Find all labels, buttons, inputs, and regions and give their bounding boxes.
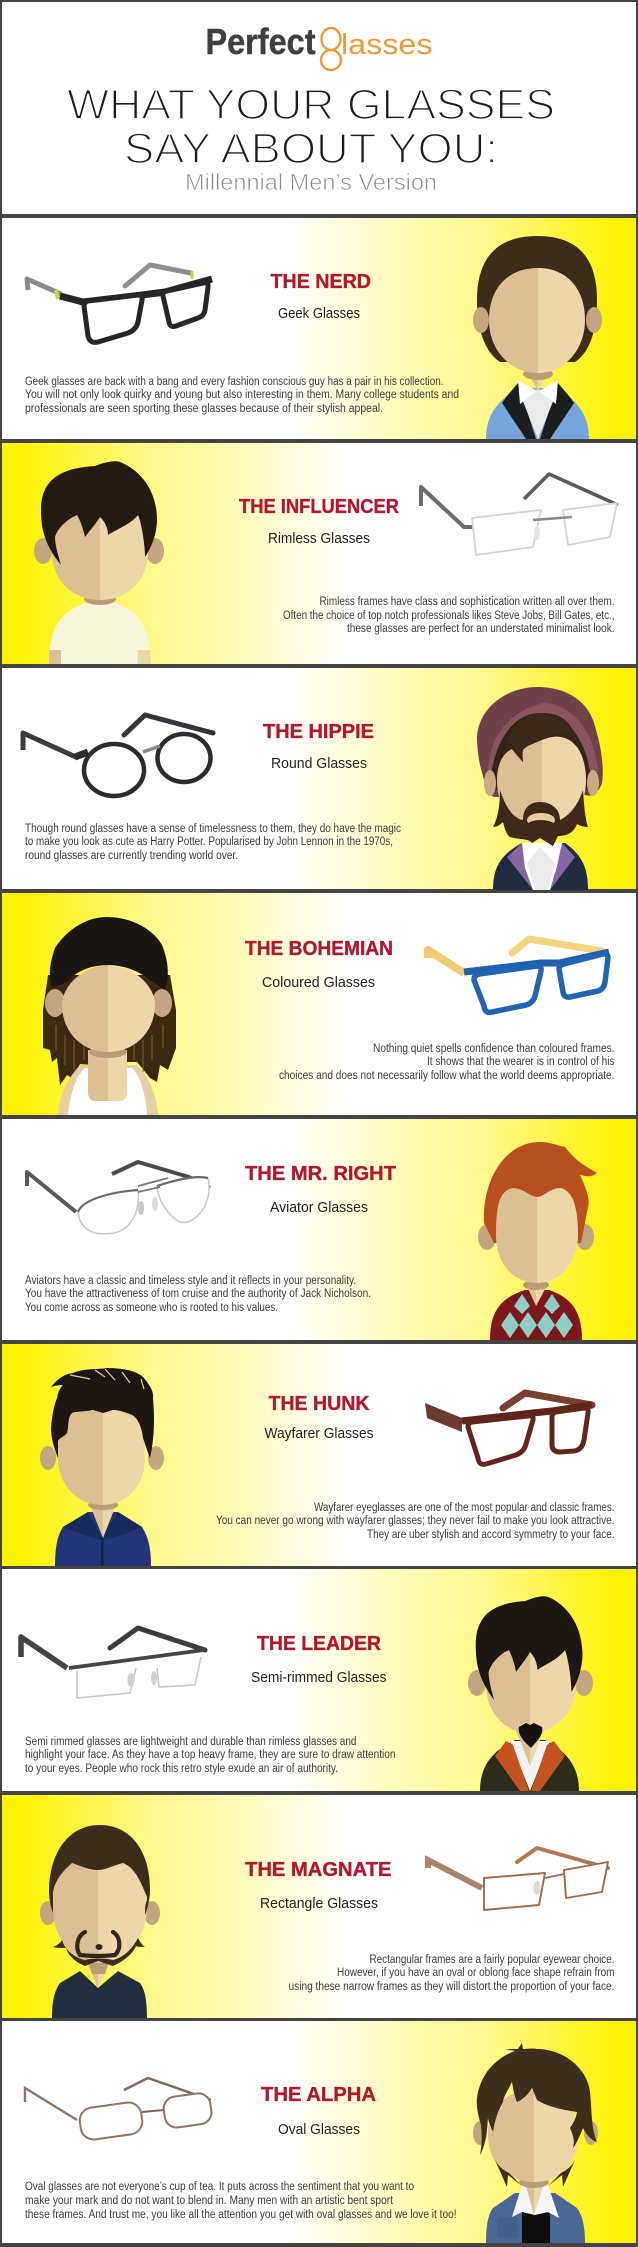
description: professionals are seen sporting these glasses because of their stylish appeal. — [25, 403, 383, 415]
character: hippie — [477, 687, 603, 890]
panel: the leader — [2, 1569, 636, 1791]
description: Aviators have a classic and timeless style and it reflects in your personality. — [25, 1275, 356, 1287]
panel: the hunk — [2, 1344, 636, 1566]
character: nerd — [473, 236, 602, 439]
description — [279, 1043, 615, 1082]
glasses type: Semi-rimmed Glasses — [251, 1670, 386, 1686]
panel: the mr. right — [2, 1119, 636, 1340]
heading: THE NERD — [270, 271, 371, 293]
character: influencer — [34, 461, 164, 664]
logo: Perfect Glasses: lasses — [341, 29, 432, 61]
glasses type: Round Glasses — [271, 756, 367, 772]
panel: header — [2, 2, 636, 214]
character: hunk — [40, 1368, 164, 1566]
panel: the bohemian — [2, 893, 636, 1115]
glasses type: Coloured Glasses — [262, 975, 375, 991]
heading: THE INFLUENCER — [239, 496, 400, 518]
glasses type: Rimless Glasses — [268, 531, 370, 547]
glasses: oval — [25, 2078, 213, 2141]
description — [25, 376, 459, 415]
description: these frames. And trust me, you like all the attention you get with oval glasses and we love it too! — [25, 2209, 456, 2221]
character: magnate — [40, 1825, 160, 2018]
glasses: wayfarer — [425, 1393, 592, 1464]
description: Semi rimmed glasses are lightweight and durable than rimless glasses and — [25, 1736, 356, 1748]
panel: the magnate — [2, 1795, 636, 2018]
panel: the hippie — [2, 668, 636, 890]
description: make your mark and do not want to blend in. Many men with an artistic bent sport — [25, 2195, 394, 2207]
heading: THE BOHEMIAN — [245, 938, 393, 960]
character: leader — [468, 1596, 593, 1791]
description — [25, 1736, 396, 1775]
heading: THE MAGNATE — [245, 1859, 392, 1881]
heading: THE ALPHA — [261, 2084, 376, 2106]
heading: THE HIPPIE — [263, 721, 374, 743]
title: SAY ABOUT YOU: — [124, 125, 498, 173]
description: round glasses are currently trending world over. — [25, 850, 238, 862]
panel: the alpha — [2, 2021, 636, 2243]
description: to make you look as cute as Harry Potter. Popularised by John Lennon in the 1970s, — [25, 836, 393, 848]
description: highlight your face. As they have a top heavy frame, they are sure to draw attention — [25, 1749, 396, 1761]
description: to your eyes. People who rock this retro style exude an air of authority. — [25, 1763, 338, 1775]
glasses: round — [23, 715, 213, 796]
heading: THE MR. RIGHT — [245, 1163, 396, 1185]
glasses type: Rectangle Glasses — [260, 1896, 378, 1912]
title: WHAT YOUR GLASSES — [67, 81, 555, 129]
heading: THE LEADER — [257, 1633, 382, 1655]
logo: Perfect Glasses — [206, 21, 432, 70]
character: mr. right — [478, 1142, 597, 1340]
glasses type: Aviator Glasses — [270, 1200, 368, 1216]
description — [25, 1275, 371, 1314]
description — [288, 1954, 614, 1993]
panel: the influencer — [2, 443, 636, 664]
description: It shows that the wearer is in control of his — [427, 1056, 615, 1068]
glasses: rimless — [421, 474, 618, 555]
glasses: geek — [27, 265, 212, 342]
character: bohemian — [43, 917, 176, 1115]
description: You will not only look quirky and young but also interesting in them. Many college students and — [25, 389, 459, 401]
glasses: rectangle — [428, 1848, 608, 1910]
panel: the nerd — [2, 218, 636, 439]
description: Oval glasses are not everyone’s cup of tea. It puts across the sentiment that you want to — [25, 2181, 414, 2193]
description: Though round glasses have a sense of timelessness to them, they do have the magic — [25, 823, 401, 835]
glasses type: Wayfarer Glasses — [264, 1426, 374, 1442]
glasses type: Oval Glasses — [278, 2122, 360, 2138]
subtitle: Millennial Men’s Version — [185, 169, 437, 195]
description: You come across as someone who is rooted to his values. — [25, 1302, 278, 1314]
description — [25, 823, 401, 862]
description: Geek glasses are back with a bang and every fashion conscious guy has a pair in his collection. — [25, 376, 444, 388]
description — [283, 596, 614, 635]
description: You have the attractiveness of tom cruise and the authority of Jack Nicholson. — [25, 1288, 371, 1300]
description — [216, 1502, 614, 1541]
glasses: coloured — [428, 939, 609, 1012]
logo: Perfect Glasses: Perfect — [206, 21, 316, 62]
glasses: semi-rimmed — [21, 1628, 205, 1698]
title — [67, 81, 555, 173]
description — [25, 2181, 456, 2221]
glasses: aviator — [27, 1162, 210, 1234]
character: alpha — [473, 2043, 598, 2243]
glasses type: Geek Glasses — [278, 306, 360, 322]
heading: THE HUNK — [268, 1393, 370, 1415]
